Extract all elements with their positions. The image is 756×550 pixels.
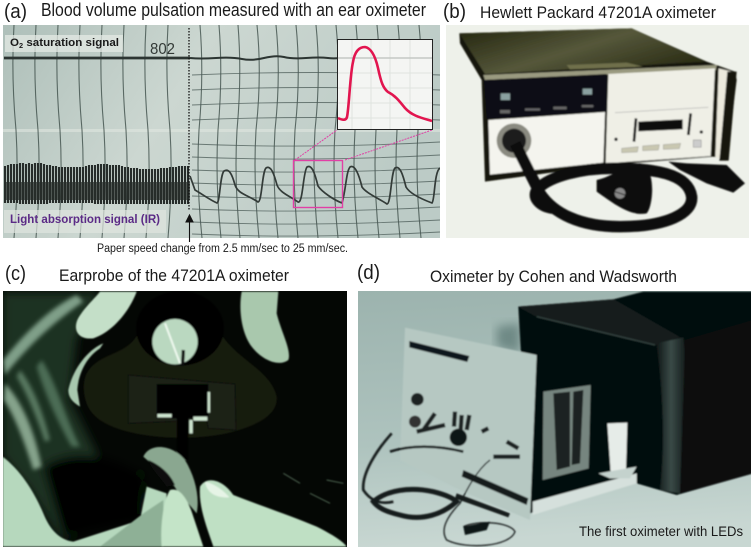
heading b: Hewlett Packard 47201A oximeter bbox=[480, 4, 716, 22]
label: O2 saturation signal: saturation signal bbox=[23, 37, 119, 49]
front control panel bbox=[484, 74, 607, 119]
inset: enlarged pulse waveform bbox=[338, 40, 432, 130]
lower white panel bbox=[488, 112, 605, 175]
round connector and cable bbox=[497, 123, 531, 158]
hair highlights bbox=[3, 295, 83, 470]
wire harness bbox=[363, 433, 463, 503]
thumbscrew bbox=[152, 319, 198, 364]
right white panel bbox=[606, 68, 715, 163]
panel b: Hewlett Packard oximeter bbox=[443, 1, 749, 238]
panel a: blood volume pulsation strip chart bbox=[3, 0, 440, 255]
label: O2 saturation signal bbox=[5, 35, 123, 52]
number 802: 802 bbox=[150, 41, 175, 58]
ear bbox=[143, 447, 198, 513]
upper left finger bbox=[76, 292, 137, 339]
second probe bbox=[668, 162, 745, 193]
front plate bbox=[400, 328, 537, 520]
panel d: Cohen and Wadsworth oximeter bbox=[357, 262, 753, 547]
heading a: Blood volume pulsation measured with an ear oximeter bbox=[41, 0, 426, 20]
probe window bbox=[128, 375, 236, 430]
label: O2 saturation signal: 2 bbox=[19, 43, 23, 50]
label: light absorption signal: Light absorption signal (IR) bbox=[10, 212, 160, 226]
zoom connector lines bbox=[295, 130, 432, 160]
floor of enclosure bbox=[533, 473, 637, 515]
heading a: (a) bbox=[4, 1, 27, 23]
infrared pulses at fast paper speed bbox=[190, 166, 440, 204]
neck, skin and probe bbox=[3, 291, 347, 547]
oxygen saturation trace bbox=[190, 56, 370, 60]
upper right finger bbox=[240, 292, 289, 363]
circuit board bbox=[543, 385, 591, 480]
arrow: paper speed change bbox=[186, 215, 193, 242]
paper speed change dotted line bbox=[188, 28, 190, 210]
heading d: Oximeter by Cohen and Wadsworth bbox=[430, 268, 677, 286]
probe body bbox=[84, 336, 277, 438]
components bbox=[411, 393, 424, 406]
enclosure bbox=[518, 292, 753, 513]
photo: earprobe held against ear bbox=[3, 291, 347, 547]
caption: paper speed change: Paper speed change from 2.5 mm/sec to 25 mm/sec. bbox=[97, 243, 348, 255]
photo: oximeter unit and cable bbox=[446, 25, 749, 238]
heading b bbox=[443, 1, 716, 23]
shadow behind enclosure bbox=[497, 323, 520, 353]
case bbox=[459, 28, 737, 182]
heading b: (b) bbox=[443, 1, 466, 23]
earprobe bbox=[597, 163, 652, 214]
label: O2 saturation signal: O bbox=[10, 37, 19, 49]
panel c: earprobe photograph bbox=[3, 263, 347, 547]
label: light absorption signal bbox=[4, 210, 166, 233]
heading d: (d) bbox=[357, 262, 380, 284]
heading d bbox=[357, 262, 677, 286]
chart paper recording bbox=[3, 25, 440, 238]
right handle bbox=[715, 68, 736, 161]
heading c bbox=[5, 263, 289, 285]
pink zoom box bbox=[294, 160, 342, 208]
caption: first oximeter with LEDs: The first oximeter with LEDs bbox=[579, 524, 743, 539]
photo: prototype oximeter bbox=[358, 291, 753, 547]
infrared absorption compressed trace bbox=[5, 163, 188, 204]
capacitor bbox=[607, 423, 627, 472]
heading c: (c) bbox=[5, 263, 26, 285]
hair bbox=[3, 292, 147, 540]
lower fingers bbox=[161, 489, 203, 547]
heading c: Earprobe of the 47201A oximeter bbox=[59, 267, 289, 285]
